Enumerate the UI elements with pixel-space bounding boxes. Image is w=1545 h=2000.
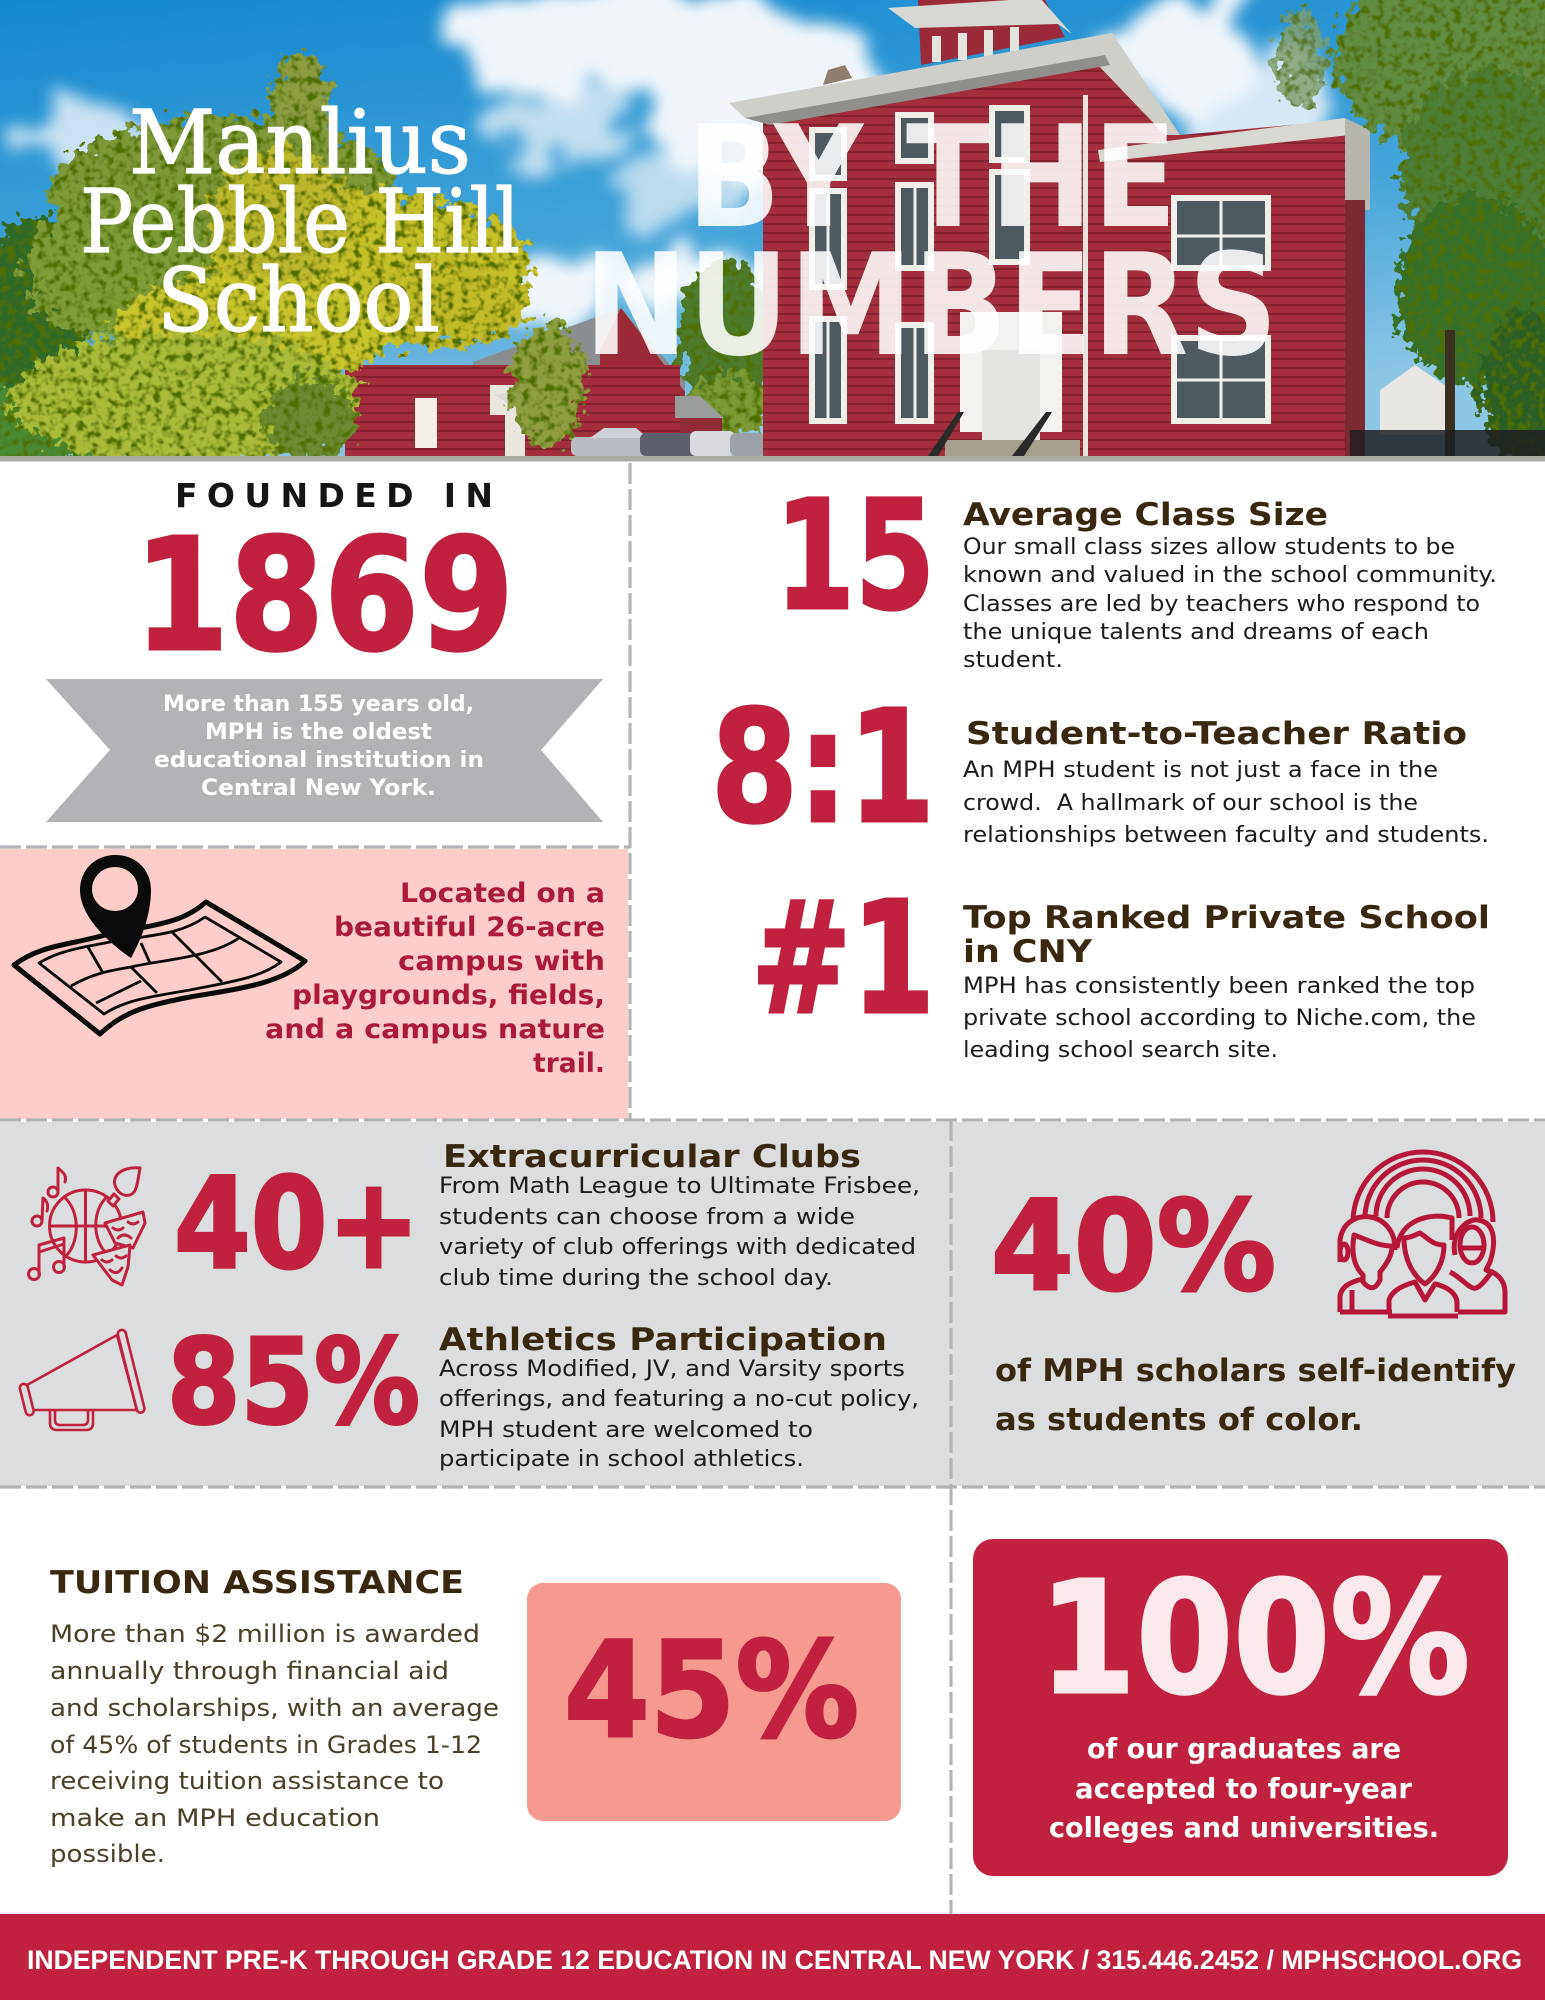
text: athletics participation: MPH student are welcomed to — [439, 1418, 813, 1443]
text: extracurricular clubs: Extracurricular Clubs — [443, 1139, 861, 1175]
number: 85%: 85% — [167, 1313, 420, 1451]
text: campus description: trail. — [533, 1048, 605, 1079]
hero title: by the numbers: NUMBERS — [584, 224, 1278, 388]
stat: average class size: Our small class sizes allow students to be — [963, 535, 1455, 560]
ribbon — [46, 679, 603, 822]
callout: 45%: 45% — [564, 1614, 859, 1768]
panel: tuition assistance: of 45% of students in Grades 1-12 — [50, 1731, 482, 1759]
school name: School — [157, 249, 440, 352]
small tree by barn — [510, 323, 586, 447]
footer banner — [0, 1914, 1545, 2000]
text: campus description: beautiful 26-acre — [334, 912, 605, 943]
text: extracurricular clubs: club time during the school day. — [439, 1266, 833, 1291]
stat: student-to-teacher ratio: 8:1 — [711, 677, 935, 858]
stat: top ranked: private school according to Niche.com, the — [963, 1006, 1476, 1031]
main building — [729, 0, 1370, 456]
text: extracurricular clubs — [439, 1139, 920, 1291]
stat: top ranked: leading school search site. — [963, 1038, 1278, 1063]
school name: Pebble Hill — [80, 170, 520, 273]
callout: 100% graduates: accepted to four-year — [1075, 1772, 1412, 1805]
distant white house — [1380, 365, 1452, 435]
stat: top ranked: #1 — [751, 868, 935, 1049]
callout: 100% graduates: of our graduates are — [1087, 1732, 1401, 1765]
callout: 100% graduates: 100% — [1039, 1548, 1470, 1729]
icon: rainbow and students — [1340, 1152, 1505, 1316]
windows — [812, 108, 1268, 421]
stat: top ranked: MPH has consistently been ranked the top — [963, 974, 1475, 999]
text: athletics participation: offerings, and featuring a no-cut policy, — [439, 1387, 919, 1412]
number: 40+: 40+ — [174, 1150, 420, 1297]
panel: tuition assistance: possible. — [50, 1840, 165, 1868]
panel: tuition assistance: More than $2 million is awarded — [50, 1620, 480, 1648]
panel: tuition assistance: make an MPH education — [50, 1804, 380, 1832]
text: students of color: as students of color. — [995, 1402, 1363, 1438]
text: extracurricular clubs: From Math League to Ultimate Frisbee, — [439, 1174, 920, 1199]
text: athletics participation — [439, 1322, 919, 1472]
panel: tuition assistance: TUITION ASSISTANCE — [50, 1565, 464, 1601]
stat: average class size: 15 — [775, 468, 935, 644]
callout: 45% — [527, 1583, 901, 1821]
hero title: by the numbers: BY THE — [687, 96, 1177, 260]
text: students of color: of MPH scholars self-identify — [995, 1353, 1516, 1389]
text: athletics participation: Across Modified, JV, and Varsity sports — [439, 1357, 905, 1382]
text: campus description: and a campus nature — [265, 1014, 605, 1045]
stat: average class size: Average Class Size — [963, 497, 1328, 533]
ribbon: Central New York. — [201, 776, 436, 801]
right trees — [1275, 0, 1545, 470]
number: 1869: 1869 — [134, 505, 514, 686]
cars — [571, 428, 765, 456]
text: extracurricular clubs: students can choose from a wide — [439, 1205, 855, 1230]
hero title: by the numbers — [595, 123, 1269, 356]
background trees behind barn — [677, 260, 773, 437]
stat: average class size: known and valued in the school community. — [963, 563, 1497, 588]
heading: founded in: FOUNDED IN — [175, 476, 493, 515]
icon: clubs — [28, 1168, 145, 1285]
icon: campus map with pin — [14, 855, 305, 1034]
panel: tuition assistance — [50, 1565, 499, 1868]
stat: student-to-teacher ratio: Student-to-Teacher Ratio — [966, 716, 1467, 752]
panel: grey activities band — [0, 1122, 1545, 1486]
icon: megaphone — [19, 1329, 145, 1430]
stat: top ranked — [751, 868, 1490, 1063]
barn — [345, 308, 724, 456]
stat: top ranked: in CNY — [963, 934, 1093, 970]
stat: average class size: the unique talents and dreams of each — [963, 620, 1429, 645]
ribbon: More than 155 years old, — [163, 692, 474, 717]
yellow-green tree — [0, 50, 530, 470]
stat: top ranked: Top Ranked Private School — [963, 900, 1490, 936]
stat: average class size: student. — [963, 648, 1063, 673]
panel: location — [0, 849, 628, 1119]
text: campus description: playgrounds, fields, — [292, 980, 605, 1011]
door — [960, 312, 1062, 432]
panel: tuition assistance: receiving tuition assistance to — [50, 1767, 444, 1795]
ribbon: educational institution in — [154, 748, 484, 773]
stat: student-to-teacher ratio — [711, 677, 1489, 858]
school name: Manlius — [129, 91, 471, 194]
stat: student-to-teacher ratio: crowd. A hallmark of our school is the — [963, 791, 1418, 816]
number: 40%: 40% — [991, 1175, 1276, 1319]
text: athletics participation: Athletics Participation — [439, 1322, 887, 1358]
ribbon: MPH is the oldest — [205, 720, 433, 745]
footer banner: INDEPENDENT PRE-K THROUGH GRADE 12 EDUCATION IN CENTRAL NEW YORK / 315.446.2452 / MPHSCHOOL.ORG — [27, 1945, 1522, 1975]
school name — [84, 105, 518, 333]
panel: founded in 1869 — [46, 476, 603, 822]
panel: tuition assistance: and scholarships, with an average — [50, 1694, 499, 1722]
stat: average class size — [775, 468, 1497, 673]
text: campus description — [265, 878, 605, 1079]
text: students of color — [995, 1353, 1516, 1438]
stat: student-to-teacher ratio: relationships between faculty and students. — [963, 823, 1489, 848]
panel: tuition assistance: annually through financial aid — [50, 1657, 449, 1685]
callout: 100% graduates — [973, 1539, 1508, 1876]
hero photo: school building — [0, 0, 1545, 470]
text: campus description: Located on a — [400, 878, 605, 909]
stat: student-to-teacher ratio: An MPH student is not just a face in the — [963, 758, 1438, 783]
callout: 100% graduates: colleges and universities. — [1049, 1811, 1439, 1844]
text: athletics participation: participate in school athletics. — [439, 1447, 804, 1472]
text: extracurricular clubs: variety of club offerings with dedicated — [439, 1235, 916, 1260]
stat: average class size: Classes are led by teachers who respond to — [963, 592, 1480, 617]
text: campus description: campus with — [398, 946, 605, 977]
